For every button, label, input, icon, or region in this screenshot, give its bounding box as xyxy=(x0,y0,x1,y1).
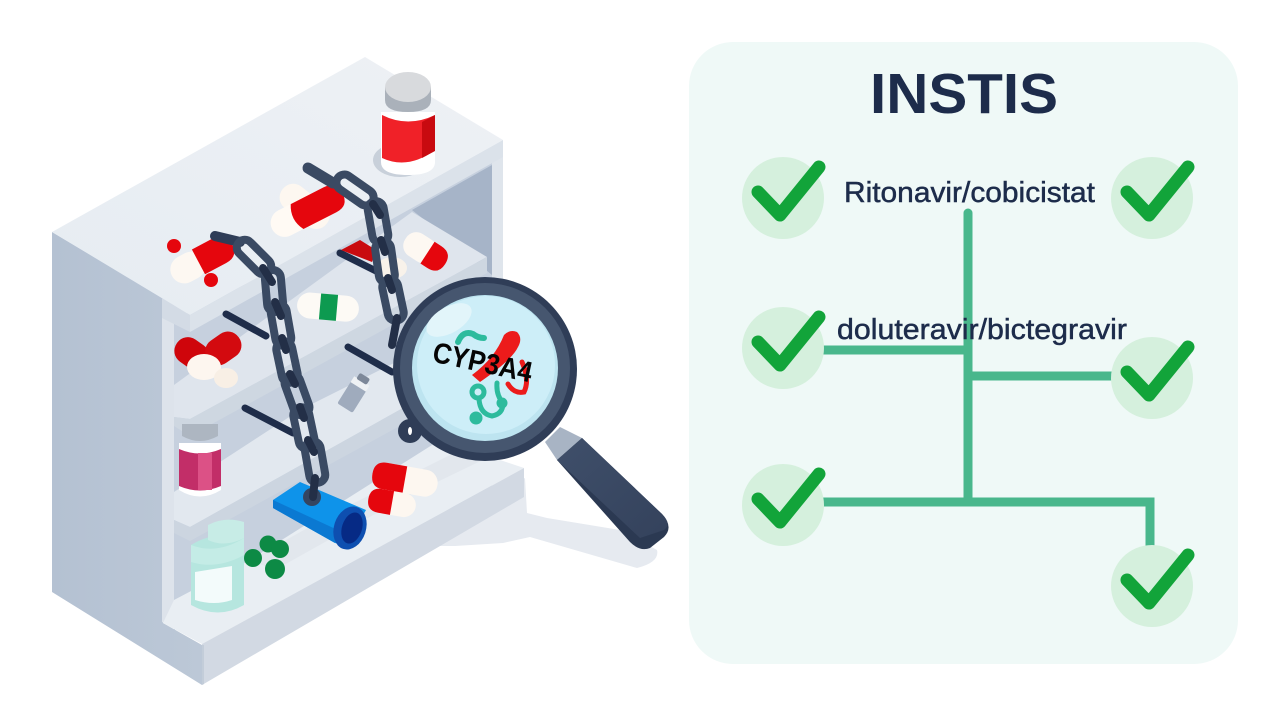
lens xyxy=(412,295,558,441)
shelf: bottom xyxy=(163,430,524,685)
check: top right xyxy=(1111,157,1193,239)
shelf back wall xyxy=(174,160,492,630)
check: lower right xyxy=(1111,545,1193,627)
check: middle right xyxy=(1111,337,1193,419)
panel: INSTIS xyxy=(689,42,1238,664)
check: lower left xyxy=(742,464,824,546)
icon: red bottle xyxy=(373,72,435,177)
label: doluteravir/bictegravir: doluteravir/bictegravir xyxy=(837,314,1127,346)
connector lines xyxy=(823,213,1150,548)
panel background xyxy=(689,42,1238,664)
lens ring xyxy=(393,277,577,461)
lens label: CYP3A4 xyxy=(430,337,535,389)
molecule: red xyxy=(472,331,527,392)
icon: capsule top left with dots xyxy=(165,232,239,288)
icon: lower red capsules xyxy=(366,461,440,519)
illustration: medicine shelf xyxy=(52,57,524,685)
icon: grey vial xyxy=(337,371,373,413)
icon: green band capsule xyxy=(296,291,360,323)
left side panel xyxy=(52,232,202,685)
chain: left xyxy=(215,236,327,497)
icon: crossed capsules xyxy=(266,179,349,242)
shelf: second xyxy=(174,212,487,436)
handle xyxy=(545,427,669,549)
icon: magnifying glass xyxy=(393,277,669,549)
heading: INSTIS xyxy=(870,62,1058,126)
icon: glass jar xyxy=(191,520,244,612)
front post xyxy=(162,300,174,628)
shelf brackets xyxy=(226,253,392,433)
lug xyxy=(398,419,422,443)
icon: crossed red capsules xyxy=(169,326,247,388)
chain: right xyxy=(308,168,405,345)
check: middle left xyxy=(742,307,824,389)
icon: green tablets xyxy=(244,536,289,579)
shelf: top surface xyxy=(52,57,503,332)
check: top left xyxy=(742,157,824,239)
upper right opening xyxy=(412,165,492,275)
label: Ritonavir/cobicistat: Ritonavir/cobicistat xyxy=(844,177,1095,209)
icon: blue tube anchor xyxy=(273,482,372,554)
molecule: teal xyxy=(458,333,505,422)
shelf: third xyxy=(174,320,480,541)
icon: capsule right of chain xyxy=(341,228,452,279)
right post xyxy=(492,152,503,285)
floor shadow xyxy=(395,478,657,568)
icon: crimson bottle xyxy=(179,424,221,496)
